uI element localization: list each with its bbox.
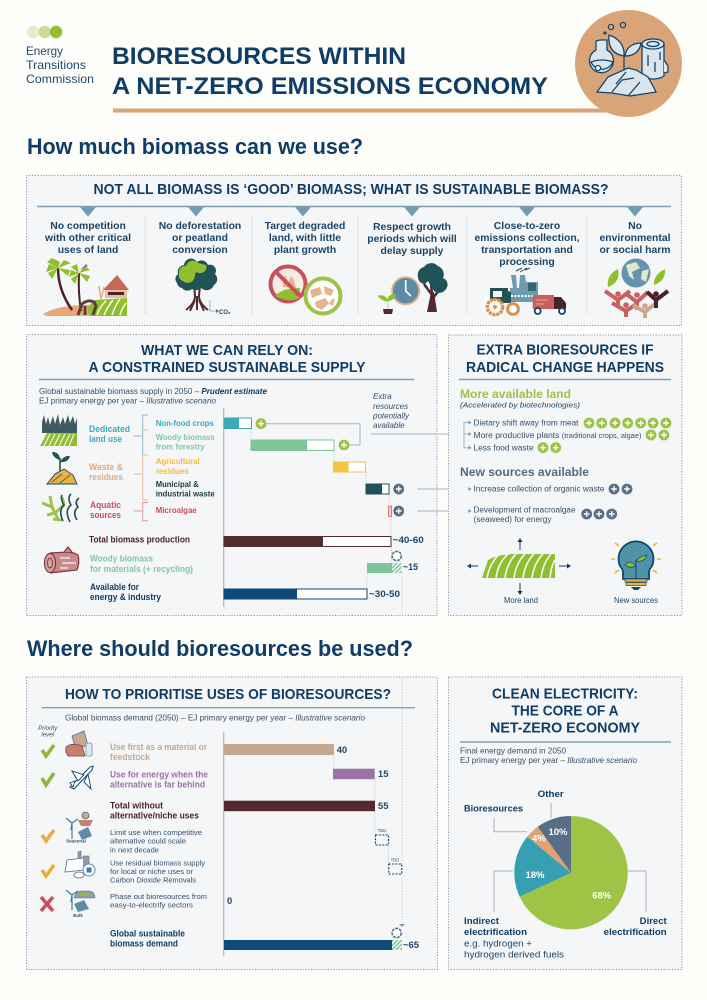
heading: where should bioresources be used: Where should bioresources be used?: [27, 636, 413, 661]
plus icons: [256, 418, 404, 516]
bar: TBD competitive alternative: TBD: [378, 828, 386, 833]
pie labels: Bioresources: [464, 803, 523, 814]
criterion: target degraded land: [265, 221, 345, 314]
use labels: Use for energy when the: [110, 769, 208, 779]
total labels: Woody biomass: [90, 554, 153, 564]
criterion: no environmental or social harm: or social harm: [599, 245, 671, 256]
waterfall bar chart: [224, 408, 424, 615]
icon: bulk electrification: [66, 890, 95, 918]
pie labels: Direct: [640, 915, 667, 926]
source labels: [156, 418, 215, 515]
icon: tree with CO2: CO₂: [219, 310, 231, 316]
bar: global demand: [224, 940, 402, 950]
use labels: [110, 742, 208, 948]
total labels: for materials (+ recycling): [90, 564, 193, 574]
use labels: feedstock: [110, 752, 150, 762]
icon: residual uses: [65, 851, 95, 878]
chart subtitle: [39, 387, 267, 406]
use descriptions: alternative could scale: [110, 837, 186, 846]
logo: Energy Transitions Commission: Transitions: [26, 58, 86, 72]
use descriptions: [110, 828, 207, 910]
use descriptions: in next decade: [110, 845, 159, 854]
slice: direct electrification 68%: [520, 816, 628, 929]
slice values: 10%: [548, 827, 568, 838]
logo: Energy Transitions Commission: Energy: [26, 44, 63, 58]
source labels: residues: [156, 466, 189, 476]
total labels: energy & industry: [90, 592, 161, 602]
list: more available land: Dietary shift away from meat: [474, 418, 579, 428]
bar: total without alternative: [224, 801, 375, 811]
criterion: no deforestation: No deforestation: [159, 221, 241, 232]
criterion: close-to-zero emissions: transportation and: [481, 245, 573, 256]
icon: recycling: [392, 928, 401, 938]
icon: new sources bulb: [611, 541, 661, 605]
bar: microalgae: [388, 506, 392, 516]
panel heading: extra bioresources: RADICAL CHANGE HAPPENS: [466, 360, 664, 376]
pie leader lines: [494, 803, 646, 912]
source labels: Agricultural: [156, 456, 200, 466]
slice values: 4%: [532, 833, 546, 844]
criterion: respect growth periods: Respect growth: [373, 222, 451, 233]
panel heading: how to prioritise: HOW TO PRIORITISE USES OF BIORESOURCES?: [65, 687, 391, 703]
panel: clean electricity: [448, 677, 682, 970]
value labels: 55: [378, 800, 388, 811]
value labels: [369, 534, 424, 599]
use descriptions: Use residual biomass supply: [110, 859, 205, 868]
title: A NET-ZERO EMISSIONS ECONOMY: [112, 73, 548, 100]
list: more available land: [474, 418, 671, 453]
slice values: [525, 827, 612, 902]
icon: aquatic algae: [42, 494, 79, 522]
value labels: ~40-60: [393, 534, 424, 545]
label: New sources: [614, 596, 658, 605]
pie chart: final energy demand: [514, 816, 628, 929]
bar: municipal waste: [366, 484, 389, 494]
panel heading: not all biomass is good: NOT ALL BIOMASS IS ‘GOOD’ BIOMASS; WHAT IS SUSTAINABLE BIOMASS?: [94, 182, 609, 198]
panel: prioritise uses: [26, 677, 438, 970]
criterion: no deforestation: [159, 221, 241, 316]
title: BIORESOURCES WITHIN: [112, 43, 406, 70]
icon: palm trees and farm: [43, 258, 129, 316]
bar: woody biomass from forestry: [251, 440, 334, 450]
chart subtitle: EJ primary energy per year – Illustrative scenario: [460, 756, 637, 765]
chart subtitle: Global biomass demand (2050) – EJ primary energy per year – Illustrative scenario: [65, 714, 365, 723]
total labels: Total biomass production: [89, 535, 190, 545]
use descriptions: Carbon Dioxide Removals: [110, 876, 196, 885]
panel: sustainable biomass criteria: [26, 176, 682, 326]
panel heading: extra bioresources: EXTRA BIORESOURCES IF: [476, 342, 654, 358]
source labels: Woody biomass: [156, 432, 215, 442]
value labels: 40: [337, 744, 347, 755]
pie labels: electrification: [464, 926, 527, 937]
value labels: ~30-50: [369, 588, 400, 599]
criterion: close-to-zero emissions: Close-to-zero: [494, 221, 560, 232]
icon: bioresources badge: [575, 10, 682, 117]
criterion: no competition: [43, 221, 131, 316]
criterion: respect growth periods: periods which will: [367, 234, 457, 245]
use labels: alternative/niche uses: [110, 811, 199, 821]
bar: agricultural residues: [334, 462, 366, 472]
list: new sources: Development of macroalgae: [474, 506, 576, 514]
criterion: target degraded land: land, with little: [269, 233, 341, 244]
subheading: more available land: More available land: [460, 388, 571, 401]
connectors to extra resources: [266, 424, 468, 511]
icon: more land: [467, 538, 571, 605]
bar: total biomass production: [224, 536, 391, 546]
criterion: no competition: uses of land: [58, 245, 118, 256]
extra resources note: potentially: [372, 412, 410, 420]
icon: recycling: [392, 551, 401, 561]
criterion: no competition: with other critical: [44, 233, 131, 244]
subheading: more available land: (Accelerated by biotechnologies): [460, 400, 580, 410]
use descriptions: easy-to-electrify sectors: [110, 901, 193, 910]
value labels: [227, 744, 419, 950]
panel heading: clean electricity: NET-ZERO ECONOMY: [490, 721, 640, 737]
extra resources note: [372, 392, 410, 430]
icon: log: [44, 547, 79, 573]
panel heading: extra bioresources: [466, 342, 664, 376]
criterion: respect growth periods: delay supply: [381, 246, 444, 257]
criterion: no deforestation: conversion: [172, 245, 228, 256]
criterion: close-to-zero emissions: emissions collection,: [474, 233, 580, 244]
icon: dedicated land use grass and field: [40, 414, 77, 446]
category labels: land use: [89, 434, 122, 444]
pie labels: Indirect: [464, 915, 499, 926]
source labels: Microalgae: [156, 505, 197, 515]
list: new sources: [474, 484, 632, 524]
bar: TBD residual: TBD: [391, 858, 399, 863]
criterion: no environmental or social harm: environmental: [599, 233, 671, 244]
icon: tractor, factory and truck: [487, 268, 566, 315]
value labels: 0: [227, 895, 232, 906]
title: [112, 43, 548, 100]
bar: available for energy: [224, 589, 367, 599]
slice: bioresources 4%: [527, 827, 571, 873]
bar: TBD competitive alternative: [376, 828, 388, 845]
use labels: alternative is far behind: [110, 779, 205, 789]
criterion: close-to-zero emissions: processing: [499, 257, 555, 268]
use descriptions: Phase out bioresources from: [110, 892, 207, 901]
criterion: target degraded land: plant growth: [274, 245, 336, 256]
panel heading: what we can rely on: [88, 343, 366, 376]
subheading: more available land: [460, 388, 580, 410]
icon: waste pile with seedling: [47, 452, 77, 484]
priority checks: [41, 745, 54, 911]
source labels: Non-food crops: [156, 418, 214, 428]
slice: indirect electrification 18%: [514, 837, 571, 897]
use descriptions: for local or niche uses or: [110, 867, 194, 876]
icon: clock, tree and seedling: [378, 263, 448, 314]
category labels: Aquatic: [90, 500, 121, 510]
criterion: close-to-zero emissions: [474, 221, 580, 315]
use labels: Use first as a material or: [110, 742, 208, 752]
panel heading: clean electricity: [490, 686, 640, 737]
category labels: Dedicated: [89, 424, 130, 434]
panel: extra bioresources: [448, 335, 682, 616]
subheading: new sources available: New sources available: [460, 466, 590, 479]
value labels: ~15: [403, 561, 418, 572]
slice: other 10%: [538, 816, 571, 873]
category brackets: [134, 415, 148, 521]
criterion: respect growth periods: [367, 222, 457, 314]
panel heading: clean electricity: CLEAN ELECTRICITY:: [492, 686, 638, 702]
extra resources note: resources: [373, 402, 408, 411]
panel heading: what we can rely on: A CONSTRAINED SUSTAINABLE SUPPLY: [88, 360, 366, 376]
icon: seasonal: [66, 812, 93, 844]
priority level label: [38, 725, 58, 738]
total labels: [89, 535, 193, 602]
icon: globe, leaves and people: [605, 258, 668, 318]
chart subtitle: [460, 746, 637, 765]
bar: non-food crops: [224, 418, 252, 428]
list: more available land: More productive plants (traditional crops, algae): [474, 431, 642, 440]
source labels: industrial waste: [156, 488, 215, 498]
priority level label: Priority: [38, 725, 58, 732]
criterion: no environmental or social harm: [599, 221, 671, 318]
category labels: residues: [89, 472, 123, 482]
bar: TBD residual: [389, 858, 402, 874]
extra resources note: available: [373, 421, 405, 430]
criterion: target degraded land: Target degraded: [265, 221, 345, 232]
icon: materials: [66, 731, 92, 756]
list: new sources: (seaweed) for energy: [474, 515, 552, 524]
slice values: 18%: [525, 870, 545, 881]
use labels: Total without: [110, 801, 163, 811]
chart subtitle: EJ primary energy per year – Illustrative scenario: [39, 396, 216, 406]
use labels: Global sustainable: [110, 928, 185, 938]
pie labels: e.g. hydrogen +: [464, 938, 533, 949]
panel heading: clean electricity: THE CORE OF A: [512, 704, 619, 720]
list: new sources: Increase collection of organic waste: [474, 484, 605, 494]
panel heading: what we can rely on: WHAT WE CAN RELY ON:: [141, 343, 313, 359]
extra resources note: Extra: [373, 392, 392, 401]
list: more available land: Less food waste: [474, 444, 534, 452]
total labels: Available for: [90, 582, 140, 592]
pie labels: hydrogen derived fuels: [464, 949, 564, 960]
icon: seasonal: Seasonal: [66, 838, 86, 844]
criterion: no competition: No competition: [50, 221, 126, 232]
slice values: 68%: [592, 891, 612, 902]
heading: how much biomass: How much biomass can we use?: [27, 134, 363, 159]
priority level label: level: [41, 732, 55, 738]
icon: bulk electrification: Bulk: [73, 913, 83, 918]
chart subtitle: Global sustainable biomass supply in 2050 – Prudent estimate: [39, 387, 267, 396]
chart subtitle: Final energy demand in 2050: [460, 746, 566, 755]
bar: energy use: [333, 769, 375, 779]
pie labels: Other: [538, 788, 564, 799]
line connecting arrows: [464, 420, 472, 513]
title underline: [113, 108, 608, 112]
source labels: Municipal &: [156, 479, 199, 489]
use descriptions: Limit use when competitive: [110, 828, 202, 837]
logo: Energy Transitions Commission: [26, 26, 94, 86]
criterion: no environmental or social harm: No: [628, 221, 642, 232]
panel: constrained sustainable supply: [26, 334, 468, 616]
source labels: from forestry: [156, 442, 205, 452]
bar: woody biomass for materials: [367, 563, 402, 573]
bar: material use: [224, 744, 334, 755]
logo: Energy Transitions Commission: Commission: [26, 72, 94, 86]
icon: degraded land: [270, 266, 340, 314]
category labels: sources: [90, 510, 121, 520]
criterion: no deforestation: or peatland: [172, 233, 228, 244]
value labels: ~65: [403, 939, 419, 950]
pie labels: electrification: [604, 926, 667, 937]
label: More land: [504, 596, 538, 605]
use labels: biomass demand: [110, 938, 178, 948]
demand bar chart: [224, 678, 419, 956]
value labels: 15: [378, 768, 388, 779]
pie labels: [464, 788, 667, 960]
category labels: [89, 424, 130, 520]
category labels: Waste &: [89, 462, 123, 472]
icon: plane: [70, 766, 93, 789]
